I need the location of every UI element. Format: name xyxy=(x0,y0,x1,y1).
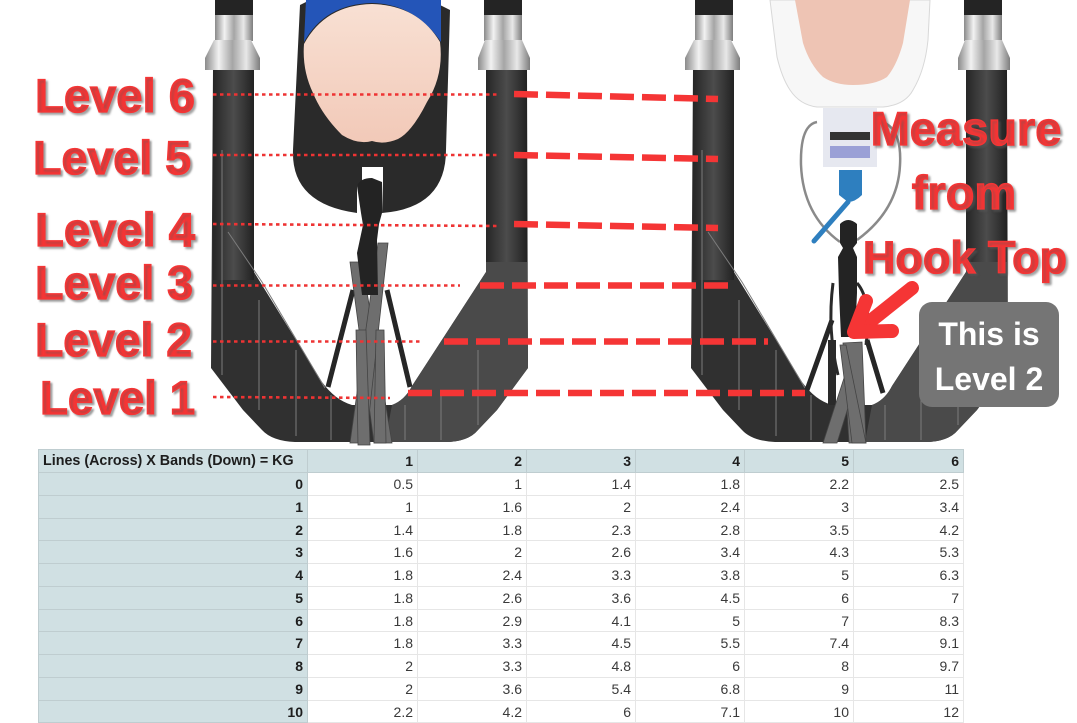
clear bottle xyxy=(770,0,930,107)
prosthetic tip xyxy=(304,4,441,143)
straps xyxy=(807,320,883,393)
weight table xyxy=(38,449,964,723)
weight table: 1.8 xyxy=(394,612,413,628)
weight table: 0 xyxy=(295,476,303,492)
left device xyxy=(205,0,530,445)
hook xyxy=(357,178,382,295)
weight table: 4.5 xyxy=(721,590,740,606)
measure callout: Hook Top xyxy=(863,232,1067,283)
level 1: Level 1 xyxy=(40,371,195,424)
weight table: 5 xyxy=(841,567,849,583)
weight table: Lines (Across) X Bands (Down) = KG xyxy=(43,453,294,469)
weight table: 2.3 xyxy=(612,522,631,538)
weight table: 3 xyxy=(295,544,303,560)
level 2 badge: This is xyxy=(938,316,1040,352)
weight table: 2 xyxy=(405,681,413,697)
weight table: 9.1 xyxy=(940,635,959,651)
weight table: 4 xyxy=(732,453,740,469)
weight table: 1.8 xyxy=(503,522,522,538)
weight table: 1.6 xyxy=(394,544,413,560)
weight table: 1 xyxy=(405,453,413,469)
measure callout: Measure xyxy=(871,102,1061,155)
weight table: 5 xyxy=(841,453,849,469)
weight table: 6.8 xyxy=(721,681,740,697)
level labels xyxy=(33,69,195,424)
straps xyxy=(328,290,410,387)
level 5: Level 5 xyxy=(33,131,191,184)
weight table: 10 xyxy=(833,704,849,720)
weight table: 3.6 xyxy=(503,681,522,697)
weight table: 2.6 xyxy=(503,590,522,606)
weight table: 3.3 xyxy=(503,658,522,674)
weight table: 7 xyxy=(951,590,959,606)
connector xyxy=(823,108,877,167)
weight table: 3.4 xyxy=(721,544,740,560)
blue cuff xyxy=(304,0,441,42)
weight table: 3.6 xyxy=(612,590,631,606)
weight table: 7 xyxy=(841,612,849,628)
weight table: 3.4 xyxy=(940,499,959,515)
weight table: 3.3 xyxy=(503,635,522,651)
weight table: 3.8 xyxy=(721,567,740,583)
wire loop xyxy=(801,122,900,242)
weight table: 1.4 xyxy=(612,476,631,492)
weight table: 1.8 xyxy=(394,590,413,606)
weight table: 3 xyxy=(841,499,849,515)
level 2 badge: Level 2 xyxy=(935,361,1043,397)
weight table: 2 xyxy=(405,658,413,674)
weight table: 5 xyxy=(295,590,303,606)
weight table: 1.8 xyxy=(394,567,413,583)
weight table: 1.8 xyxy=(721,476,740,492)
photo and annotations xyxy=(33,0,1070,446)
weight table: 2 xyxy=(295,522,303,538)
weight table: 6 xyxy=(841,590,849,606)
level 3: Level 3 xyxy=(35,256,193,309)
weight table: 2.4 xyxy=(503,567,522,583)
weight table: 2.2 xyxy=(394,704,413,720)
weight table: 1 xyxy=(295,499,303,515)
weight table: 2.6 xyxy=(612,544,631,560)
weight table: 6 xyxy=(295,612,303,628)
weight table: 10 xyxy=(287,704,303,720)
rubber bands xyxy=(350,243,392,445)
weight table: 4.1 xyxy=(612,612,631,628)
weight table: 7.4 xyxy=(830,635,849,651)
weight table: 2.5 xyxy=(940,476,959,492)
arrow to hook xyxy=(854,288,912,332)
weight table: 4.3 xyxy=(830,544,849,560)
weight table: 1.4 xyxy=(394,522,413,538)
weight table: 6 xyxy=(623,704,631,720)
measure callout xyxy=(863,102,1067,283)
weight table: 5 xyxy=(732,612,740,628)
weight table: 3 xyxy=(623,453,631,469)
level 2: Level 2 xyxy=(35,313,192,366)
weight table: 1 xyxy=(405,499,413,515)
holder plate xyxy=(293,0,450,213)
hook xyxy=(838,220,857,337)
weight table: 5.3 xyxy=(940,544,959,560)
right device xyxy=(685,0,1010,443)
weight table: 2.2 xyxy=(830,476,849,492)
weight table: 9 xyxy=(841,681,849,697)
weight table: 4.5 xyxy=(612,635,631,651)
weight table: 2.4 xyxy=(721,499,740,515)
weight table: 5.5 xyxy=(721,635,740,651)
weight table: 8 xyxy=(295,658,303,674)
weight table: 6 xyxy=(951,453,959,469)
weight table: 6.3 xyxy=(940,567,959,583)
weight table: 2 xyxy=(623,499,631,515)
weight table: 5.4 xyxy=(612,681,631,697)
weight table: 8.3 xyxy=(940,612,959,628)
blue tube xyxy=(839,170,862,202)
prosthetic tip in bottle xyxy=(795,0,910,85)
weight table: 2.9 xyxy=(503,612,522,628)
weight table: 3.5 xyxy=(830,522,849,538)
dashed level lines xyxy=(408,94,805,393)
level 4: Level 4 xyxy=(35,203,195,256)
dotted level lines xyxy=(213,94,498,398)
rubber bands xyxy=(823,342,866,443)
weight table: 7 xyxy=(295,635,303,651)
weight table: 11 xyxy=(944,681,959,697)
weight table: 12 xyxy=(943,704,959,720)
measure callout: from xyxy=(912,166,1016,219)
weight table: 4 xyxy=(295,567,303,583)
weight table: 7.1 xyxy=(721,704,740,720)
level 6: Level 6 xyxy=(35,69,195,122)
weight table: 8 xyxy=(841,658,849,674)
strap arch xyxy=(831,283,868,375)
weight table: 2.8 xyxy=(721,522,740,538)
weight table: 1.6 xyxy=(503,499,522,515)
weight table: 2 xyxy=(514,453,522,469)
weight table: 3.3 xyxy=(612,567,631,583)
weight table: 2 xyxy=(514,544,522,560)
level 2 badge xyxy=(919,302,1059,407)
weight table: 1 xyxy=(514,476,522,492)
weight table: 4.2 xyxy=(503,704,522,720)
weight table: 4.8 xyxy=(612,658,631,674)
weight table: 1.8 xyxy=(394,635,413,651)
weight table: 0.5 xyxy=(394,476,413,492)
weight table: 9.7 xyxy=(940,658,959,674)
weight table: 9 xyxy=(295,681,303,697)
weight table: 4.2 xyxy=(940,522,959,538)
weight table: 6 xyxy=(732,658,740,674)
